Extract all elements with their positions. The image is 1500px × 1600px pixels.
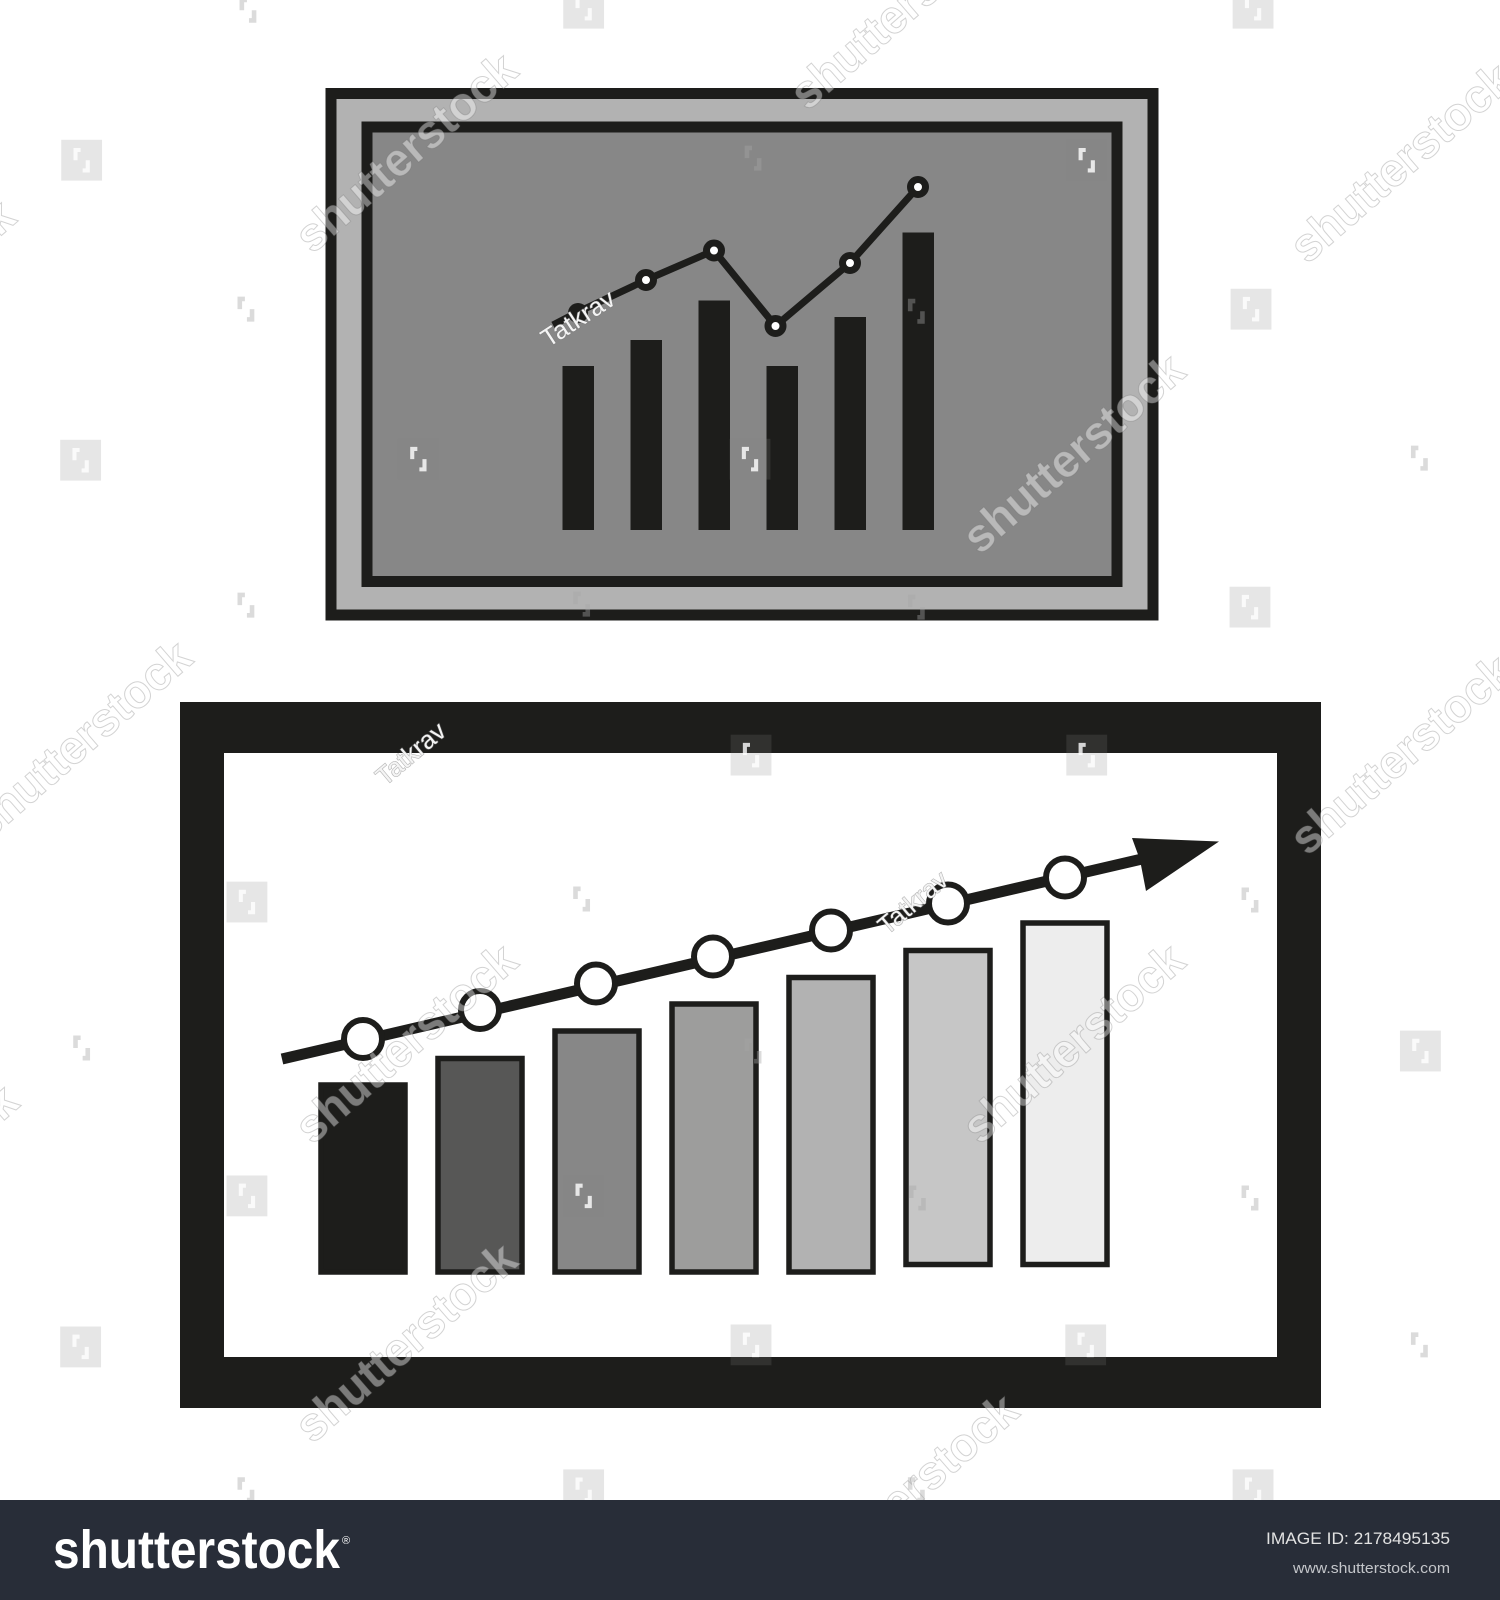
- watermark overlay: Tatkrav: [371, 717, 452, 791]
- footer logo: ®: [342, 1535, 350, 1547]
- bar chart: six dark bars: [562, 232, 934, 530]
- footer logo: shutterstock: [53, 1520, 341, 1580]
- footer bar: [0, 1500, 1500, 1600]
- website url: www.shutterstock.com: [1292, 1560, 1450, 1577]
- watermark overlay: Tatkrav: [873, 866, 954, 940]
- thick frame: [180, 702, 1321, 1408]
- white chart area: [224, 753, 1277, 1357]
- watermark overlay: shutterstock: [786, 1382, 1029, 1600]
- watermark overlay: shutterstock: [285, 932, 528, 1153]
- watermark overlay: shutterstock: [285, 1231, 528, 1452]
- inner screen: [367, 127, 1117, 582]
- watermark overlay: shutterstock: [952, 932, 1195, 1153]
- watermark overlay: Tatkrav: [536, 285, 621, 353]
- watermark overlay: shutterstock: [952, 343, 1195, 563]
- trend point markers: [344, 858, 1084, 1058]
- panel: top chart board: [331, 94, 1153, 615]
- arrow: rising trend line: [282, 838, 1219, 1059]
- bar chart: seven ascending bars: [321, 923, 1107, 1272]
- watermark overlay: shutterstock: [285, 42, 528, 262]
- outer frame: [331, 94, 1153, 615]
- panel: bottom growth chart board: [180, 702, 1321, 1408]
- line chart with point markers: [553, 180, 926, 334]
- image id: IMAGE ID: 2178495135: [1266, 1529, 1450, 1548]
